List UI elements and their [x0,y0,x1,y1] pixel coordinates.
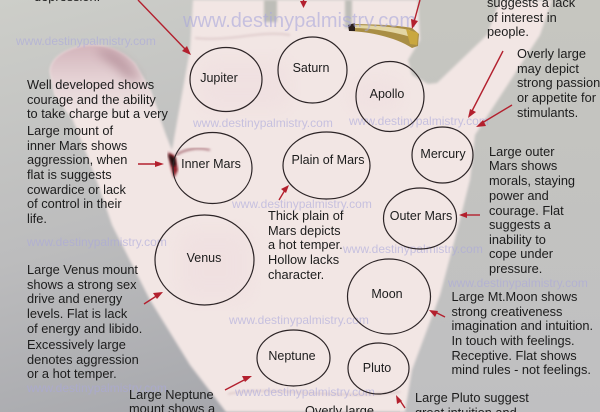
text: Pluto note [305,390,529,412]
text: Outer Mars note: cope under [489,246,554,261]
text: Plain of Mars note: a hot temper. [268,237,343,252]
text: Moon note: Large Mt.Moon shows [452,289,577,304]
watermarks: www.destinypalmistry.com [228,313,369,327]
text: Moon note: In touch with feelings. [452,333,575,348]
mount labels: Outer Mars [390,209,452,223]
watermarks: www.destinypalmistry.com [26,381,167,395]
text: Venus note [27,262,142,381]
text: Mercury notes: Overly large [517,46,586,61]
mount labels: Inner Mars [181,157,241,171]
text: Venus note: Large Venus mount [27,262,138,277]
text: Mercury notes: strong passion [517,75,600,90]
text: thumb notes: Well developed shows [27,77,154,92]
text: Mercury notes: stimulants. [517,105,578,120]
mount labels: Jupiter [200,71,238,85]
text: Mercury notes: people. [487,24,529,39]
mount labels: Pluto [363,361,391,375]
mount circles [155,37,473,394]
text: thumb notes: inner Mars shows [27,138,127,153]
watermarks: www.destinypalmistry.com [234,385,375,399]
text: Moon note [452,289,593,377]
text: Outer Mars note: morals, staying [489,173,575,188]
watermarks: www.destinypalmistry.com [182,10,416,32]
text: Outer Mars note: Mars shows [489,158,557,173]
text: thumb notes: courage and the ability [27,92,156,107]
text: thumb notes: to take charge but a very [27,106,168,121]
text: Outer Mars note: Large outer [489,144,555,159]
text: Mercury notes: may depict [517,61,579,76]
text: Pluto note: Large Pluto suggest [415,390,529,405]
text: Plain of Mars note: Thick plain of [268,208,344,223]
finger gaps [264,0,352,28]
text: thumb notes: aggression, when [27,152,127,167]
text: Moon note: imagination and intuition. [452,318,593,333]
text: thumb notes: life. [27,211,47,226]
mount labels: Venus [187,251,221,265]
text: Venus note: drive and energy [27,291,123,306]
text: Venus note: shows a strong sex [27,277,137,292]
text: Moon note: Receptive. Flat shows [452,348,577,363]
arrows [138,0,512,408]
ring [348,23,419,48]
mount labels: Plain of Mars [292,153,364,167]
text: Plain of Mars note [268,208,344,282]
mount labels: Apollo [370,87,404,101]
mount labels: Saturn [293,61,329,75]
mount labels: Mercury [420,147,466,161]
watermarks: www.destinypalmistry.com [231,197,372,211]
text: Plain of Mars note: Hollow lacks [268,252,339,267]
text: Outer Mars note: suggests a [489,217,552,232]
text: Mercury notes: or appetite for [517,90,597,105]
text: thumb notes [27,0,168,226]
text: Outer Mars note: power and [489,188,549,203]
watermarks: www.destinypalmistry.com [342,242,483,256]
text: Plain of Mars note: Mars depicts [268,223,341,238]
text: Neptune note [129,387,216,412]
text: thumb notes: of control in their [27,196,122,211]
text: Outer Mars note: pressure. [489,261,542,276]
text: Outer Mars note: courage. Flat [489,203,564,218]
watermarks: www.destinypalmistry.com [348,114,489,128]
text: Mercury notes: of interest in [487,10,557,25]
text: Venus note: Excessively large [27,337,126,352]
text: Outer Mars note: inability to [489,232,546,247]
text: Mercury notes [487,0,600,120]
mount labels: Neptune [268,349,316,363]
text: thumb notes: Large mount of [27,123,114,138]
text: thumb notes: flat is suggests [27,167,112,182]
watermarks: www.destinypalmistry.com [26,235,167,249]
text: Venus note: of energy and libido. [27,321,142,336]
watermarks: www.destinypalmistry.com [447,276,588,290]
text: Outer Mars note [489,144,575,276]
text: thumb notes: cowardice or lack [27,182,126,197]
text: Moon note: strong creativeness [452,304,562,319]
mount labels [181,61,466,375]
text: Venus note: or a hot temper. [27,366,117,381]
text: Neptune note: Large Neptune [129,387,214,402]
text: Venus note: levels. Flat is lack [27,306,128,321]
text: Plain of Mars note: character. [268,267,324,282]
watermarks: www.destinypalmistry.com [15,34,156,48]
text: Moon note: mind rules - not feelings. [452,362,591,377]
watermarks: www.destinypalmistry.com [192,116,333,130]
text: Venus note: denotes aggression [27,352,139,367]
mount labels: Moon [371,287,403,301]
